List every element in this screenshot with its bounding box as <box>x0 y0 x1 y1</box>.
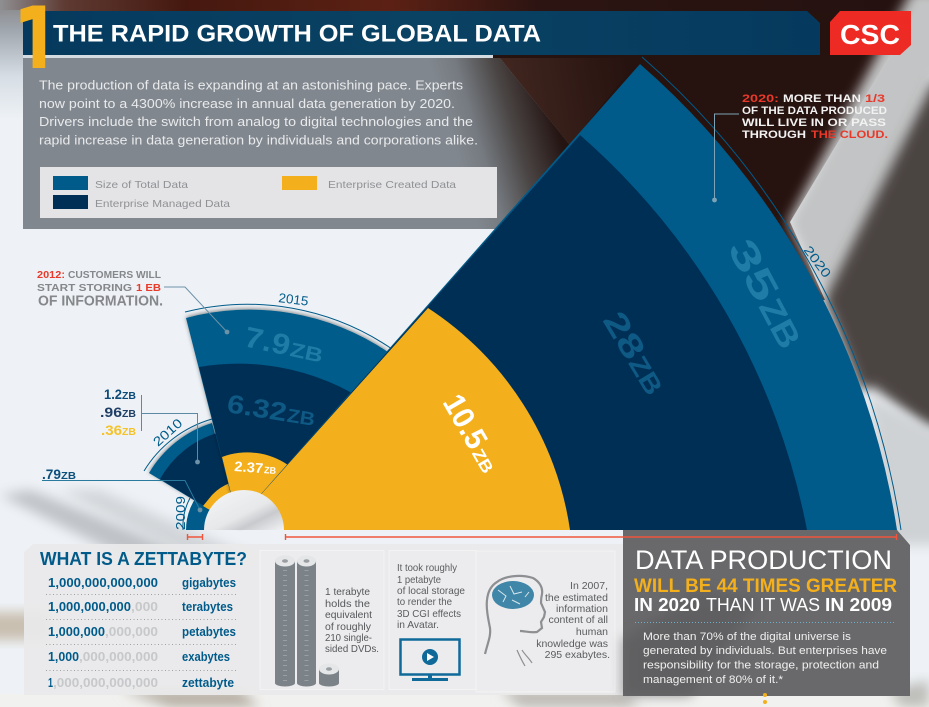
value: 6.32 ZB: ZB <box>285 406 316 431</box>
table of units <box>48 575 236 690</box>
value: 2.37 ZB: 2.37 <box>234 458 264 476</box>
callout: 2020 cloud <box>712 93 888 202</box>
intro text panel <box>23 58 570 229</box>
callout: 2020 cloud: WILL LIVE IN OR PASS <box>742 117 886 129</box>
table of units: 1,000,000,000 <box>48 599 131 614</box>
sector: 2009 <box>173 489 244 530</box>
range bracket: 2009 <box>188 534 202 540</box>
sector: 2020: 2020 <box>801 243 834 281</box>
intro paragraph: The production of data is expanding at an astonishing pace. Experts <box>39 78 464 92</box>
knowledge text: information <box>556 603 608 615</box>
headline: IN 2020 <box>634 595 700 615</box>
value: 6.32 ZB: 6.32 <box>225 388 289 427</box>
intro paragraph: now point to a 4300% increase in annual data generation by 2020. <box>39 96 455 111</box>
table of units: ,000 <box>131 599 158 614</box>
value: 35 ZB: ZB <box>752 292 808 355</box>
icon: DVD stacks <box>275 556 339 686</box>
callout: 2020 cloud: OF THE DATA PRODUCED <box>742 105 887 117</box>
petabyte text: It took roughly <box>397 562 458 574</box>
chart: data growth sectors <box>144 57 901 530</box>
body text: responsibility for the storage, protection and <box>643 660 879 672</box>
callout: 2009 value <box>42 466 202 512</box>
knowledge text: 295 exabytes. <box>545 649 610 661</box>
value: 28 ZB: 28 <box>596 305 653 366</box>
knowledge text: human <box>576 626 608 638</box>
sector: 2015: 2015 <box>278 290 309 309</box>
CSC logo: CSC <box>840 19 900 50</box>
callout: 2012 one exabyte <box>37 269 229 334</box>
intro paragraph: Drivers include the switch from analog to digital technologies and the <box>39 114 473 129</box>
callout: 2010 values <box>100 386 200 464</box>
page marker dots <box>763 693 767 704</box>
table of units: ,000,000,000,000 <box>53 675 158 690</box>
value: 35 ZB: 35 <box>719 232 787 309</box>
callout: 2012 one exabyte: 2012: <box>37 269 65 281</box>
terabyte text: holds the <box>325 598 370 610</box>
body text: generated by individuals. But enterprises have <box>643 645 887 657</box>
icon: screen with play button <box>400 640 460 681</box>
panel: human knowledge <box>476 551 615 692</box>
callout: 2010 values: .36 <box>101 422 122 438</box>
petabyte text: 3D CGI effects <box>397 608 461 620</box>
legend: Enterprise Managed Data <box>95 198 230 210</box>
callout: 2010 values: .96 <box>100 404 122 420</box>
value: 28 ZB <box>596 305 674 401</box>
petabyte text: of local storage <box>397 585 465 597</box>
table of units: gigabytes <box>182 575 236 590</box>
terabyte text: of roughly <box>325 621 372 633</box>
callout: 2012 one exabyte: CUSTOMERS WILL <box>68 269 162 281</box>
panel: data production <box>623 530 910 696</box>
terabyte text: 1 terabyte <box>325 586 370 598</box>
table of units: 1,000,000,000,000 <box>48 575 158 590</box>
knowledge text: the estimated <box>545 592 608 604</box>
value: 35 ZB <box>719 232 812 356</box>
table of units: 1,000,000 <box>48 624 105 639</box>
value: 7.9 ZB: ZB <box>288 339 325 368</box>
callout: 2012 one exabyte: OF INFORMATION. <box>38 294 163 310</box>
callout: 2020 cloud: MORE THAN <box>783 93 861 105</box>
callout: 2012 one exabyte: START STORING <box>37 282 132 294</box>
value: 2.37 ZB <box>234 458 277 477</box>
legend: Enterprise Created Data <box>328 179 456 191</box>
body text <box>643 631 887 686</box>
headline: THAN IT WAS <box>706 595 820 615</box>
table of units: exabytes <box>182 649 230 664</box>
sector: 2015 <box>185 290 392 530</box>
table of units: 1 <box>48 675 53 690</box>
headline: WILL BE 44 TIMES GREATER <box>634 576 897 597</box>
callout: 2009 value: .79 <box>42 466 61 482</box>
table of units: petabytes <box>182 624 236 639</box>
legend: Size of Total Data <box>95 179 188 191</box>
callout: 2020 cloud: 1/3 <box>865 93 885 105</box>
center hole <box>204 490 284 530</box>
body text: management of 80% of it.* <box>643 674 784 686</box>
value: 10.5 ZB <box>436 388 508 478</box>
callout: 2020 cloud: THE CLOUD. <box>811 129 888 141</box>
headline: DATA PRODUCTION <box>635 545 892 575</box>
range bracket: 2020 <box>286 534 896 540</box>
sector: 2009: 2009 <box>173 496 188 530</box>
title bar: THE RAPID GROWTH OF GLOBAL DATA <box>53 20 541 48</box>
table of units: ,000,000 <box>105 624 158 639</box>
callout: 2010 values: 1.2 <box>104 386 122 402</box>
value: 6.32 ZB <box>225 388 318 432</box>
terabyte text: 210 single- <box>325 632 372 644</box>
callout: 2020 cloud: THROUGH <box>742 129 806 141</box>
icon: head with brain <box>485 576 545 666</box>
sector: 2010: 2010 <box>150 415 185 449</box>
sector: 2010 <box>144 415 240 525</box>
value: 7.9 ZB <box>242 322 326 369</box>
petabyte text: 1 petabyte <box>397 574 441 586</box>
table of units: ,000,000,000 <box>79 649 158 664</box>
panel: what is a zettabyte <box>24 544 623 695</box>
knowledge text: content of all <box>548 614 608 626</box>
value: 2.37 ZB: ZB <box>264 465 277 477</box>
title bar <box>23 11 820 58</box>
petabyte text: to render the <box>397 596 452 608</box>
headline <box>634 545 897 615</box>
value: 28 ZB: ZB <box>623 350 669 400</box>
legend <box>40 167 497 218</box>
panel: terabyte DVDs <box>260 550 384 690</box>
body text: More than 70% of the digital universe is <box>643 631 852 643</box>
table of units: 1,000 <box>48 649 79 664</box>
intro paragraph <box>39 78 478 148</box>
sector: 2020 <box>247 57 901 530</box>
knowledge text: In 2007, <box>570 580 608 592</box>
callout: 2020 cloud: 2020: <box>742 93 779 105</box>
table of units: zettabyte <box>182 675 234 690</box>
terabyte text <box>325 586 379 655</box>
callout: 2009 value: ZB <box>61 470 76 482</box>
heading: WHAT IS A ZETTABYTE? <box>40 549 247 569</box>
value: 10.5 ZB: ZB <box>468 446 497 477</box>
knowledge text: knowledge was <box>536 638 608 650</box>
CSC logo <box>830 11 911 55</box>
value: 10.5 ZB: 10.5 <box>436 388 495 455</box>
terabyte text: sided DVDs. <box>325 643 379 655</box>
callout: 2010 values: ZB <box>122 426 136 438</box>
terabyte text: equivalent <box>325 609 372 621</box>
callout: 2010 values: ZB <box>122 390 136 402</box>
table of units: terabytes <box>182 599 233 614</box>
petabyte text <box>397 562 465 631</box>
headline: IN 2009 <box>825 595 892 615</box>
intro paragraph: rapid increase in data generation by individuals and corporations alike. <box>39 132 478 148</box>
petabyte text: in Avatar. <box>397 619 439 631</box>
callout: 2012 one exabyte: 1 EB <box>136 282 161 294</box>
knowledge text <box>536 580 610 661</box>
callout: 2010 values: ZB <box>122 408 136 420</box>
panel: petabyte Avatar <box>389 550 476 690</box>
value: 7.9 ZB: 7.9 <box>242 322 293 362</box>
